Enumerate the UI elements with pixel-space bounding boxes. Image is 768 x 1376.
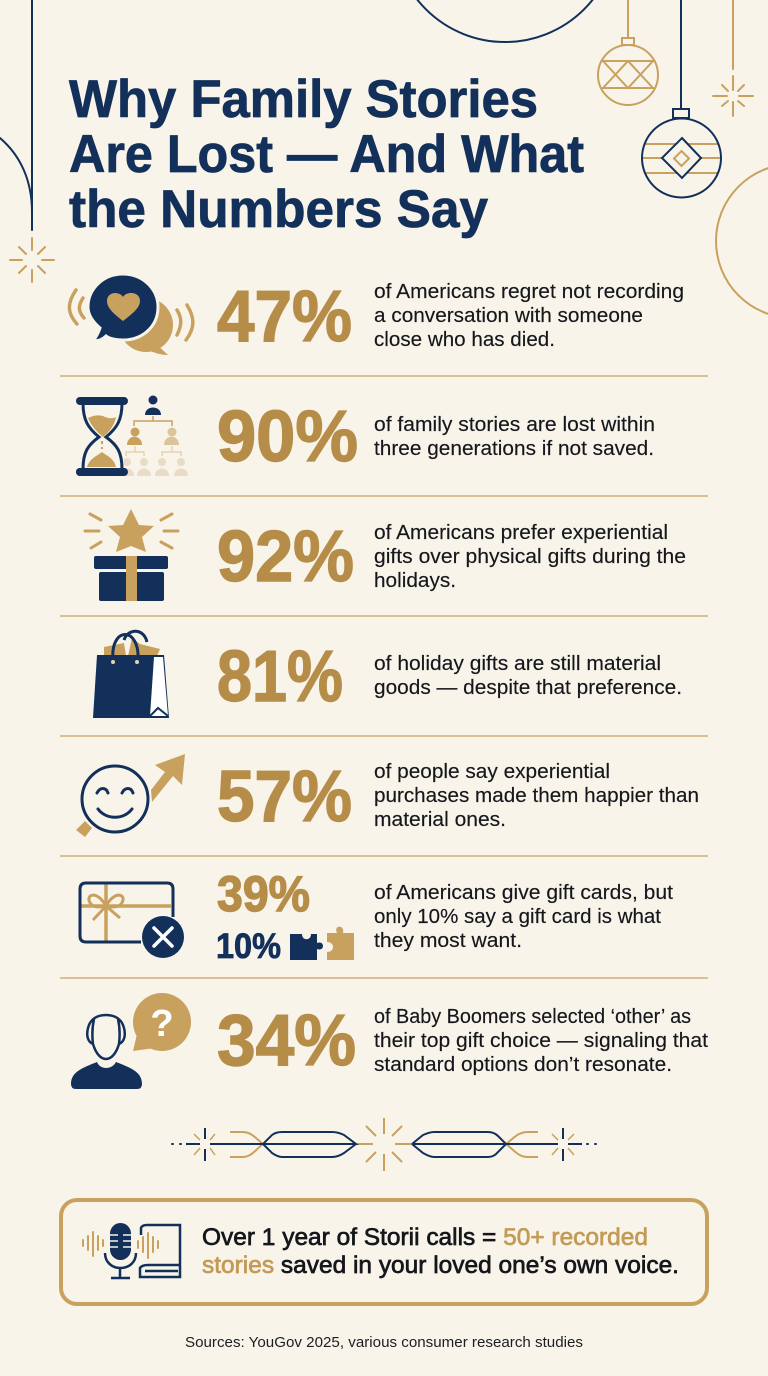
title: Why Family Stories bbox=[69, 70, 538, 129]
callout text: Over 1 year of Storii calls = 50+ recorded bbox=[202, 1224, 648, 1251]
description: 90% bbox=[374, 414, 655, 460]
row 5: 57% bbox=[76, 754, 699, 837]
row 6: 39% and 10% bbox=[80, 866, 673, 966]
stat: 47%: 47% bbox=[217, 277, 352, 357]
icon: shopping bag bbox=[93, 631, 169, 718]
description: 47%: a conversation with someone bbox=[374, 305, 643, 327]
icon: gift card with x bbox=[80, 883, 184, 958]
description: 34%: their top gift choice — signaling that bbox=[374, 1030, 708, 1052]
row 7: 34% bbox=[71, 993, 708, 1089]
description: 39% and 10%: of Americans give gift cards, but bbox=[374, 882, 673, 904]
description: 92%: gifts over physical gifts during the bbox=[374, 546, 686, 568]
title: the Numbers Say bbox=[69, 180, 489, 239]
icon: puzzle pieces bbox=[290, 927, 354, 960]
row 2: 90% bbox=[76, 396, 655, 477]
decorative top-left line and star bbox=[0, 0, 54, 282]
ornament: gold bbox=[598, 0, 658, 105]
description: 90%: of family stories are lost within bbox=[374, 414, 655, 436]
stat: 92%: 92% bbox=[217, 517, 354, 597]
callout panel bbox=[61, 1200, 707, 1304]
description: 47%: of Americans regret not recording bbox=[374, 281, 684, 303]
stat: 81%: 81% bbox=[217, 637, 343, 717]
description: 34%: of Baby Boomers selected ‘other’ as bbox=[374, 1006, 691, 1028]
description: 92% bbox=[374, 522, 686, 592]
stat: 10%: 10% bbox=[216, 927, 281, 966]
description: 34% bbox=[374, 1006, 708, 1076]
sources: Sources: YouGov 2025, various consumer research studies bbox=[185, 1334, 583, 1351]
callout text bbox=[202, 1224, 679, 1279]
title: Are Lost — And What bbox=[69, 125, 584, 184]
description: 34%: standard options don’t resonate. bbox=[374, 1054, 672, 1076]
description: 57%: purchases made them happier than bbox=[374, 785, 699, 807]
icon: hourglass and family tree bbox=[76, 396, 188, 476]
description: 39% and 10%: they most want. bbox=[374, 930, 522, 952]
description: 81%: of holiday gifts are still material bbox=[374, 653, 661, 675]
stat: 39%: 39% bbox=[217, 866, 310, 922]
description: 57%: material ones. bbox=[374, 809, 506, 831]
ornament: navy bbox=[642, 0, 721, 198]
decorative gold line, star and circle on the right bbox=[713, 0, 768, 318]
icon: speech bubbles with heart bbox=[69, 274, 193, 355]
icon: smiley with arrow bbox=[76, 754, 185, 837]
decorative top circle arc bbox=[393, 0, 617, 42]
description: 90%: three generations if not saved. bbox=[374, 438, 654, 460]
description: 47%: close who has died. bbox=[374, 329, 555, 351]
stat: 90%: 90% bbox=[217, 397, 358, 477]
row 3: 92% bbox=[85, 509, 686, 601]
icon: microphone and book bbox=[83, 1223, 180, 1278]
description: 39% and 10%: only 10% say a gift card is what bbox=[374, 906, 661, 928]
icon: older person with question bubble: ? bbox=[150, 1003, 174, 1045]
row 4: 81% bbox=[93, 631, 682, 718]
description: 81% bbox=[374, 653, 682, 699]
description: 39% and 10% bbox=[374, 882, 673, 952]
description: 47% bbox=[374, 281, 684, 351]
stat: 34%: 34% bbox=[217, 1001, 356, 1081]
decorative divider ornament bbox=[172, 1118, 596, 1171]
description: 92%: holidays. bbox=[374, 570, 456, 592]
stat: 57%: 57% bbox=[217, 757, 352, 837]
row 1: 47% bbox=[69, 274, 684, 357]
description: 57%: of people say experiential bbox=[374, 761, 610, 783]
row dividers bbox=[60, 376, 708, 978]
description: 92%: of Americans prefer experiential bbox=[374, 522, 668, 544]
icon: older person with question bubble bbox=[71, 993, 191, 1089]
title bbox=[69, 70, 584, 239]
description: 57% bbox=[374, 761, 699, 831]
callout text: stories saved in your loved one’s own voice. bbox=[202, 1252, 679, 1279]
description: 81%: goods — despite that preference. bbox=[374, 677, 682, 699]
icon: gift with star bbox=[85, 509, 178, 601]
